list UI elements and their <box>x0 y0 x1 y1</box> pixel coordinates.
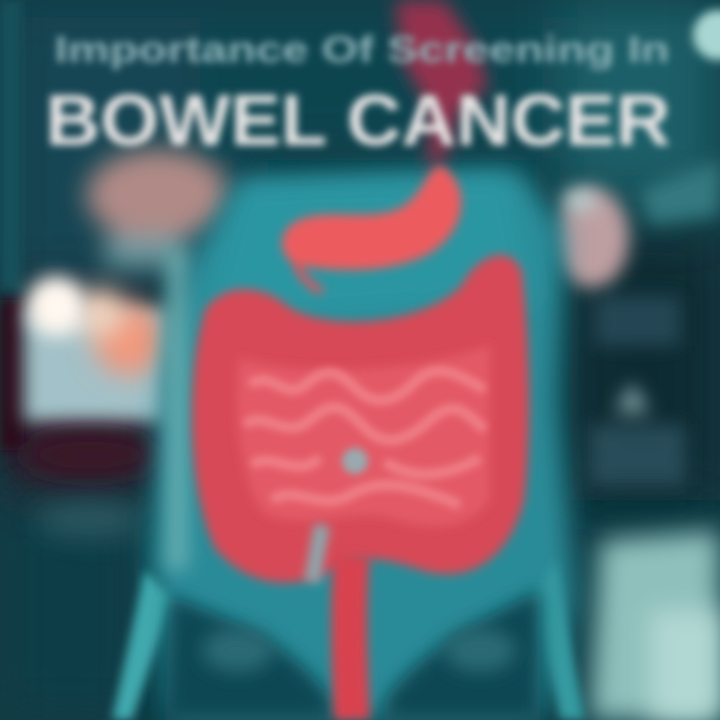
teal torso <box>112 170 585 720</box>
doctor head at left <box>86 149 230 267</box>
right side info blocks <box>590 296 685 485</box>
stomach <box>282 165 462 292</box>
rectum <box>349 555 352 720</box>
right hand <box>555 188 629 288</box>
small intestine folds <box>245 371 485 505</box>
heading: BOWEL CANCER <box>46 81 670 161</box>
subtitle: Importance Of Screening In <box>54 29 670 70</box>
esophagus <box>395 0 488 170</box>
large intestine <box>192 255 529 583</box>
glowing panel at left <box>20 276 169 538</box>
appendix <box>312 525 322 582</box>
